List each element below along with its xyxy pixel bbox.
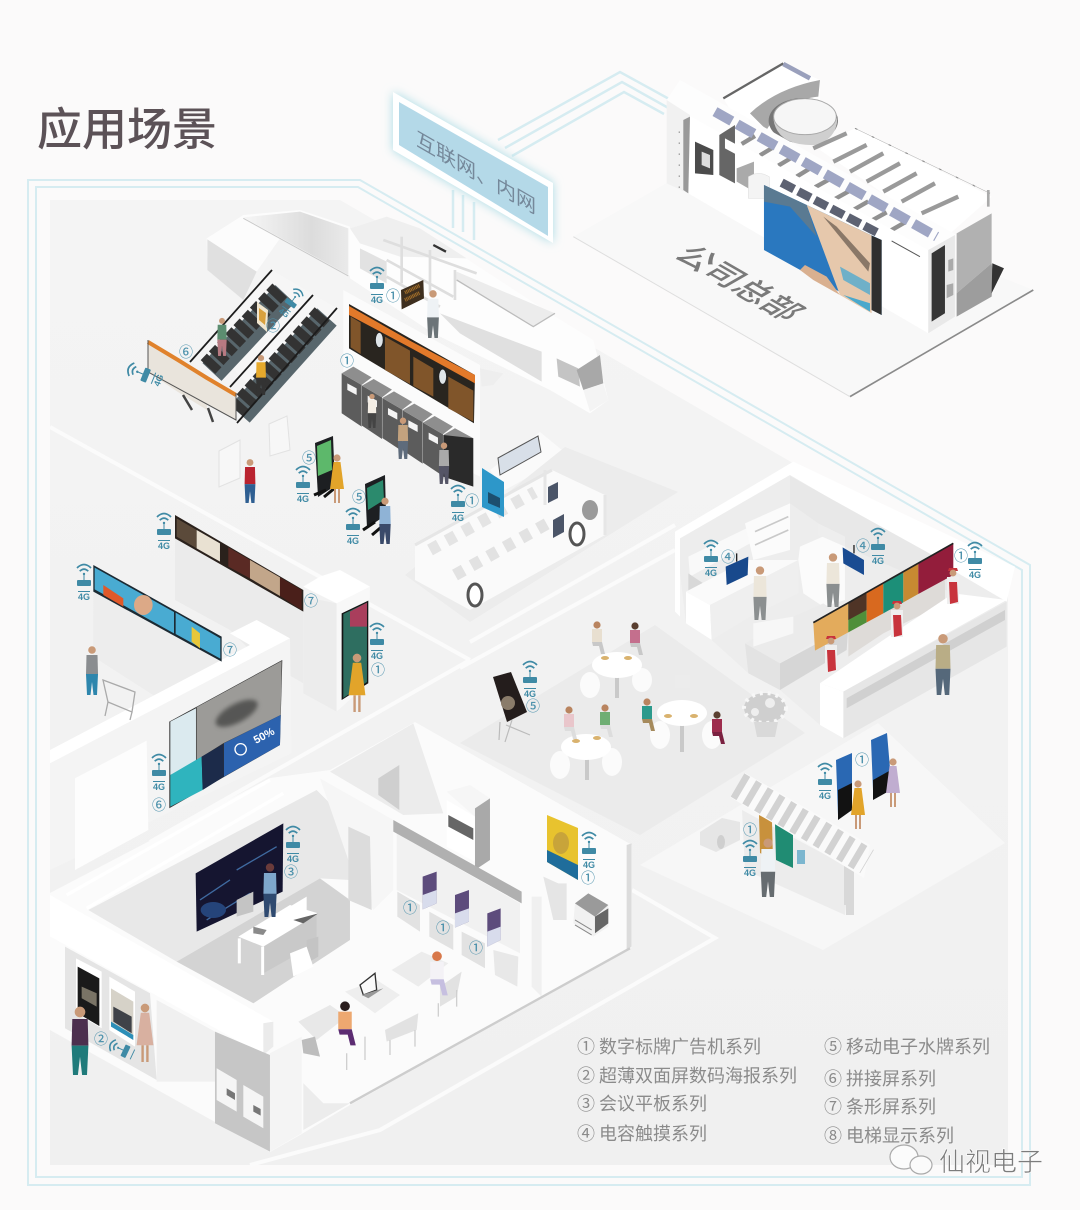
icon: wifi flat left: 4G (152, 373, 165, 388)
touch screens (726, 545, 864, 585)
billboard text: 互联网、内网 (416, 123, 536, 221)
office base (50, 722, 632, 1152)
car (700, 818, 740, 852)
icon: wifi street: 4G (744, 868, 756, 878)
icon: wifi signage B: 4G (347, 536, 359, 546)
markers along scene: ① (386, 286, 400, 306)
panel: product number markers: ② (94, 1029, 108, 1049)
icon: wifi strip B: 4G (78, 592, 90, 602)
panel: dining area (460, 621, 805, 835)
panel: product number markers (94, 286, 968, 1049)
digital poster stand (493, 672, 530, 742)
legend: ⑧ 电梯显示系列 (824, 1122, 954, 1148)
shopping cart (103, 680, 135, 720)
panel: product number markers: ① (743, 820, 757, 840)
legend: ③ 会议平板系列 (577, 1090, 707, 1116)
shop frontage (50, 895, 302, 1152)
panel: product number markers: ⑥ (152, 795, 166, 815)
elevator boards (148, 340, 236, 422)
panel: floor (50, 200, 1008, 1165)
bus stop info panel (490, 432, 568, 490)
panel: product number markers: ② (266, 316, 280, 336)
watermark (890, 1142, 1043, 1179)
restaurant shell (675, 462, 1015, 738)
icon: wifi and 4G: 4G (371, 295, 383, 305)
panel: product number markers: ⑤ (526, 696, 540, 716)
office people (72, 863, 448, 1075)
billboard frame (393, 92, 553, 243)
panel: outdoor street vendor (640, 723, 1005, 950)
panel: product number markers: ⑦ (223, 640, 237, 660)
icon: wifi kitchen B (871, 528, 885, 566)
panel: product number markers: ⑦ (304, 591, 318, 611)
panel: product number markers: ⑤ (352, 487, 366, 507)
icon: wifi signage A (296, 466, 310, 504)
icon: wechat (890, 1145, 932, 1174)
mobile screen A (314, 436, 336, 497)
icon: wifi strip B (77, 564, 91, 602)
hq floor label: 公司总部 (663, 237, 819, 327)
escalator (190, 270, 340, 423)
panel: product number markers: ① (340, 351, 354, 371)
icon: wifi menu (968, 542, 982, 580)
network lines to headquarters (498, 72, 680, 156)
panel: fast food restaurant (675, 462, 1015, 738)
icon: wifi conference (286, 826, 300, 864)
panel: product number markers: ① (436, 918, 450, 938)
panel: product number markers: ① (371, 660, 385, 680)
billboard posts (453, 190, 474, 240)
panel: product number markers: ① (954, 546, 968, 566)
panel: office (50, 722, 632, 1152)
hq building (573, 63, 1033, 397)
icon: wifi street (743, 840, 757, 878)
icon: wifi kiosk: 4G (819, 791, 831, 801)
panel: product number markers: ④ (856, 536, 870, 556)
legend: ⑥ 拼接屏系列 (824, 1065, 936, 1091)
icon: wifi poster stand: 4G (524, 689, 536, 699)
title: 应用场景 (37, 93, 217, 158)
legend column 2: ⑤ 移动电子水牌系列 (824, 1033, 990, 1059)
icon: wifi menu: 4G (969, 570, 981, 580)
panel: product number markers: ⑤ (302, 448, 316, 468)
watermark text: 仙视电子 (939, 1142, 1043, 1179)
panel: product number markers: ③ (284, 862, 298, 882)
panel: product number markers: ⑥ (179, 342, 193, 362)
legend: ② 超薄双面屏数码海报系列 (577, 1062, 797, 1088)
legend (577, 1033, 990, 1148)
icon: wifi strip A: 4G (158, 541, 170, 551)
retail people (86, 646, 365, 712)
plant (744, 693, 786, 737)
floor path lines (50, 427, 715, 1165)
icon: wifi video wall: 4G (153, 782, 165, 792)
panel: product number markers: ① (581, 868, 595, 888)
panel: retail mall (50, 515, 370, 870)
bus plate (405, 447, 678, 622)
conference room (67, 780, 350, 1003)
icon: wifi signage B (346, 508, 360, 546)
strip screen walls (50, 515, 370, 870)
desks and chairs (298, 952, 462, 1070)
awning (730, 773, 870, 878)
panel: product number markers: ① (469, 938, 483, 958)
signage people (330, 454, 391, 544)
billboard glow (393, 92, 553, 243)
icon: wifi bus (451, 486, 465, 523)
billboard panel (399, 102, 548, 236)
bus stop poster (482, 468, 504, 517)
icon: wifi office poster: 4G (583, 860, 595, 870)
icon: wifi shop (108, 1038, 135, 1060)
icon: wifi strip A (157, 514, 171, 551)
panel: blue network frame (28, 180, 1030, 1185)
panel: product number markers: ① (855, 750, 869, 770)
icon: wifi flat left (126, 362, 166, 389)
menu board screen (813, 543, 953, 651)
video wall stat: 50% (252, 726, 277, 747)
ticket gates (219, 416, 290, 487)
street plate (640, 723, 1005, 950)
panel: company headquarters (573, 63, 1033, 397)
shop wall with screens (742, 810, 850, 915)
back room and workspace (303, 723, 632, 1130)
panel: connectivity icons (77, 268, 982, 1060)
icon: wifi column (370, 624, 384, 661)
yellow poster (547, 815, 578, 880)
station wall with flight boards and kiosks (342, 290, 503, 487)
icon: wifi column: 4G (371, 651, 383, 661)
icon: wifi escalator: 4G (277, 306, 291, 320)
icon: wifi conference: 4G (287, 854, 299, 864)
legend column 1: ① 数字标牌广告机系列 (577, 1033, 761, 1059)
panel: product number markers: ① (465, 491, 479, 511)
icon: wifi office poster (582, 832, 596, 870)
panel: train station (148, 210, 608, 503)
icon: wifi signage A: 4G (297, 494, 309, 504)
panel: shuttle bus (405, 447, 678, 622)
panel: network billboard (393, 92, 553, 243)
icon: wifi kitchen A: 4G (705, 568, 717, 578)
icon: wifi kiosk (818, 764, 832, 801)
restaurant people (753, 553, 959, 695)
dining tables and chairs (550, 652, 722, 780)
legend: ⑦ 条形屏系列 (824, 1093, 936, 1119)
mobile screen B (363, 475, 386, 535)
diners (564, 621, 725, 744)
panel: product number markers: ① (403, 898, 417, 918)
icon: wifi bus: 4G (452, 513, 464, 523)
icon: wifi escalator (276, 287, 305, 320)
bus body (415, 470, 605, 610)
panel: product number markers: ④ (721, 547, 735, 567)
panel: mobile electronic signage (314, 436, 391, 544)
dining plate (460, 625, 805, 835)
legend: ④ 电容触摸系列 (577, 1120, 707, 1146)
freestanding kiosks (836, 733, 891, 820)
icon: wifi poster stand (523, 662, 537, 699)
street people (761, 758, 900, 897)
train (207, 210, 608, 413)
icon: wifi and 4G (370, 268, 384, 305)
icon: wifi kitchen B: 4G (872, 556, 884, 566)
icon: wifi video wall (152, 754, 166, 792)
icon: wifi kitchen A (704, 540, 718, 578)
station people (217, 290, 449, 503)
